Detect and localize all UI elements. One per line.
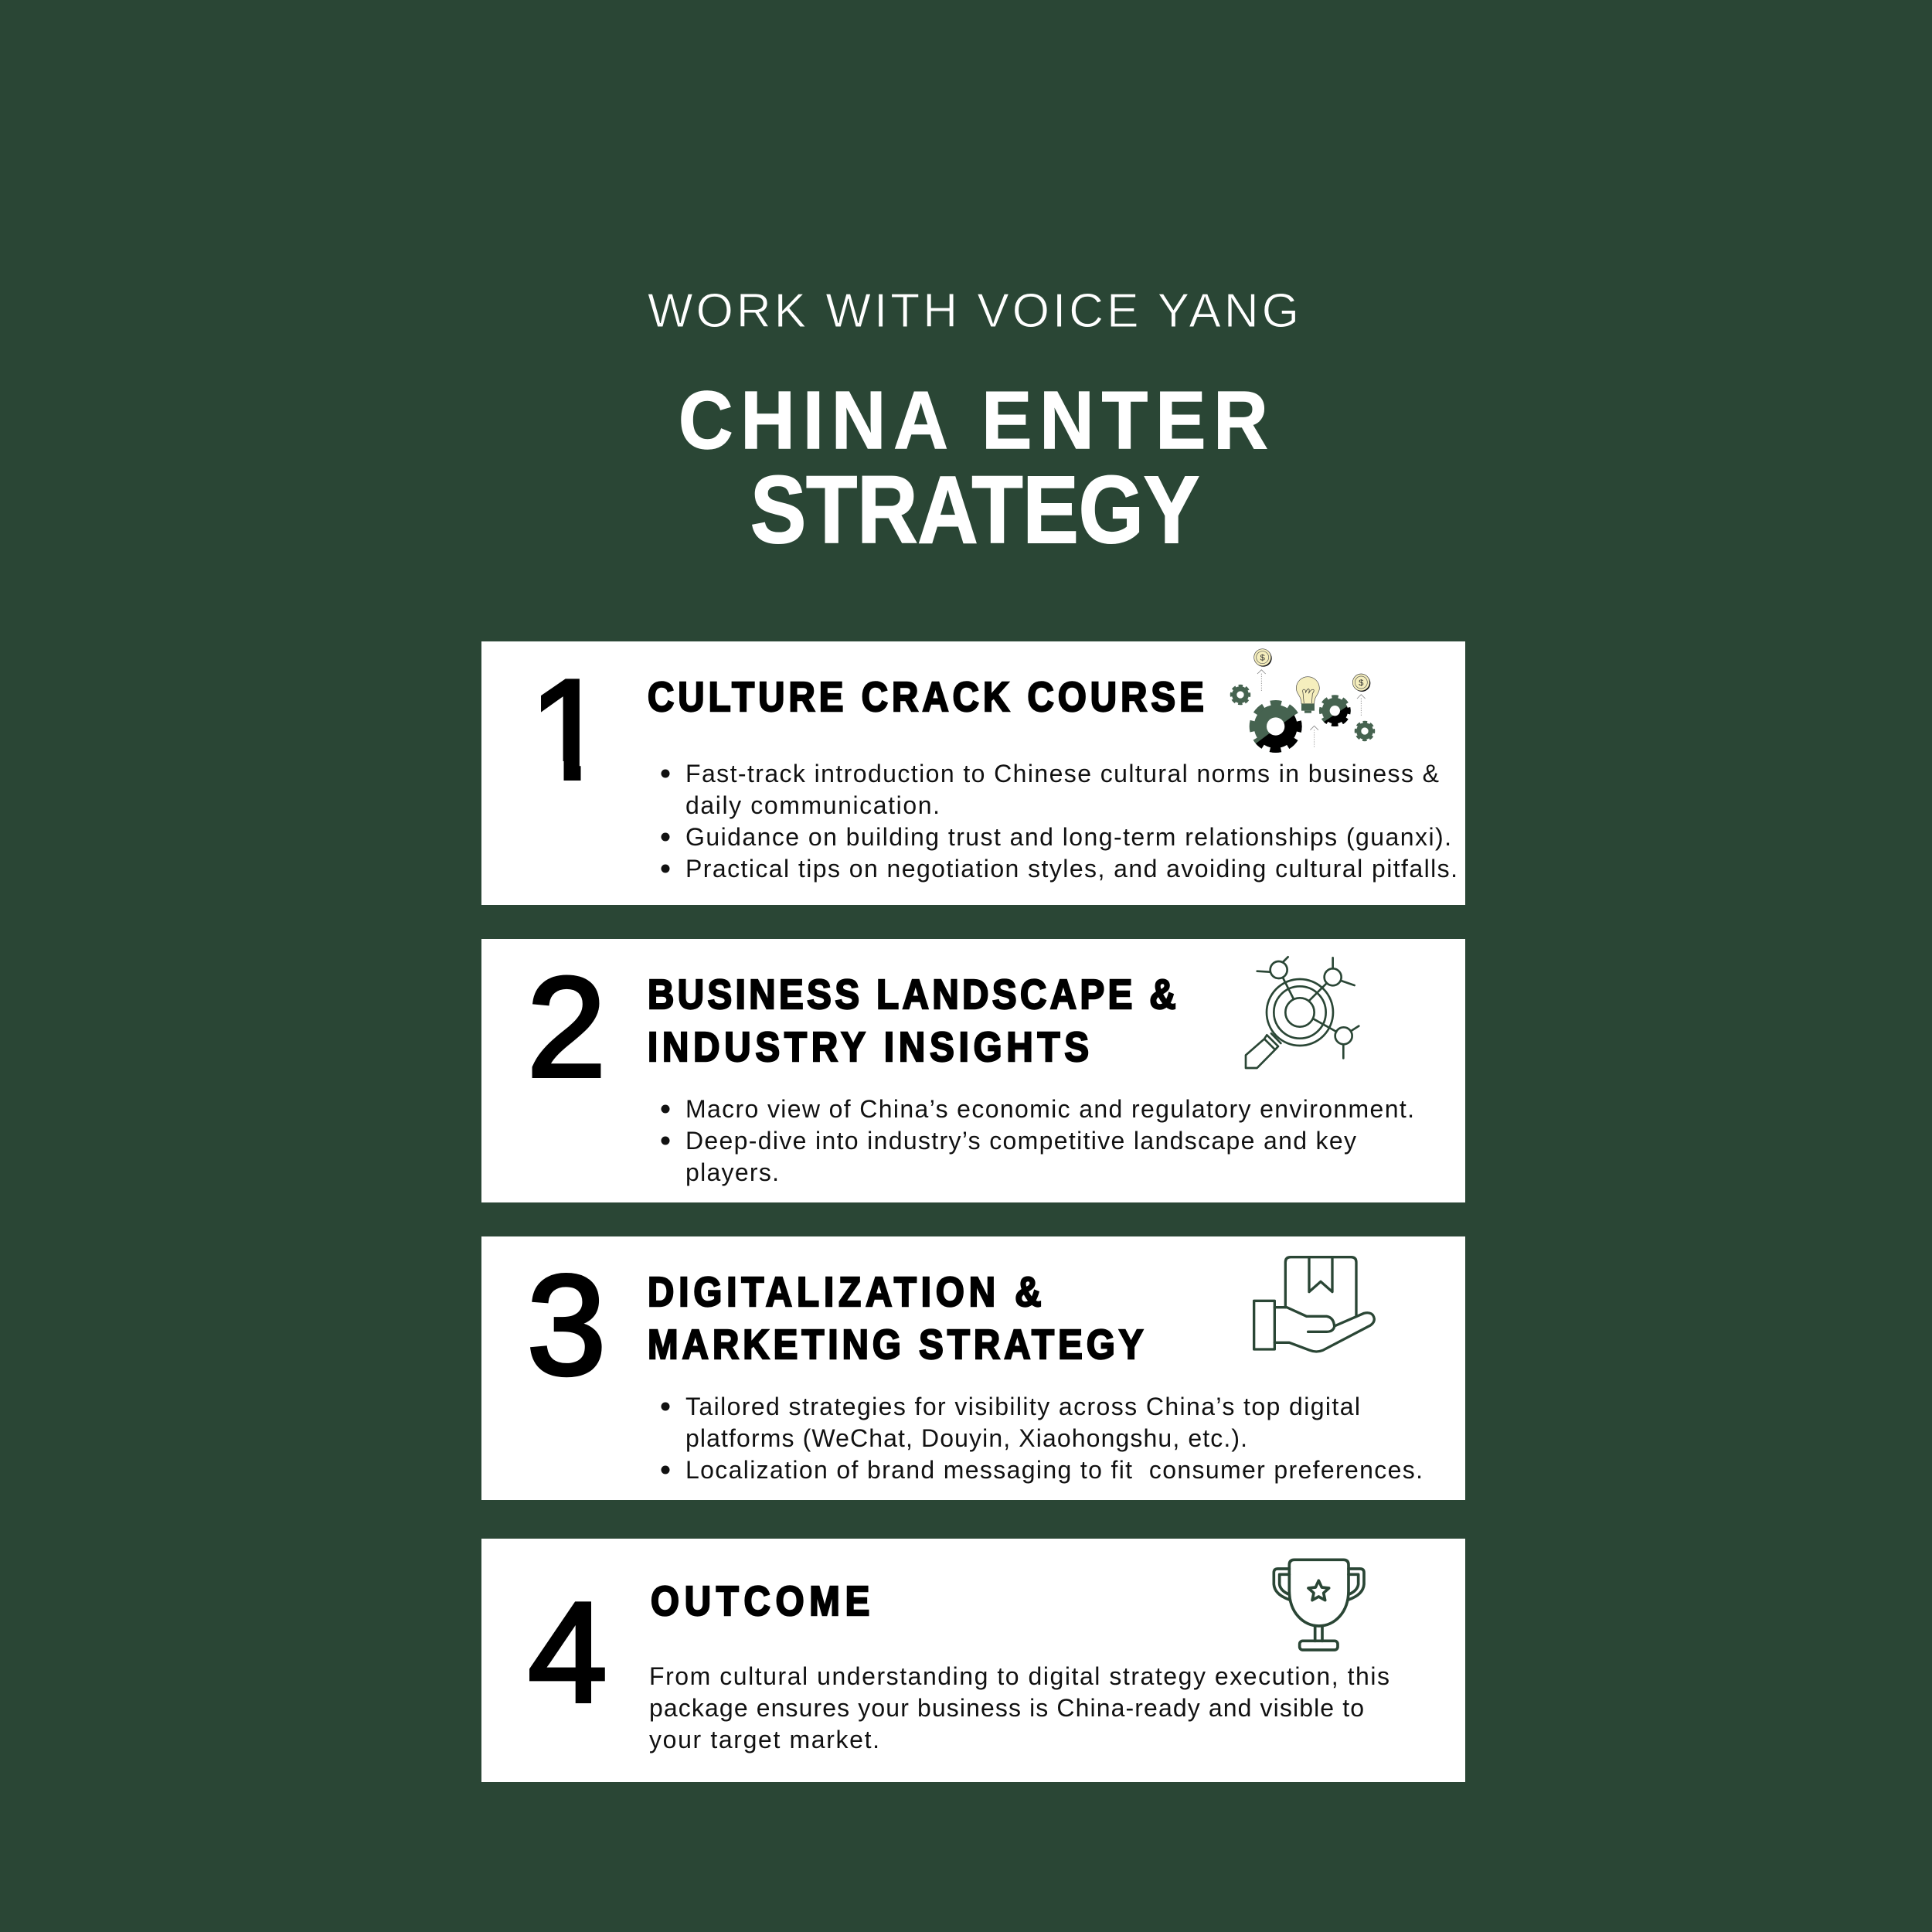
outcome paragraph: package ensures your business is China-ready and visible to bbox=[649, 1694, 1364, 1722]
outcome paragraph: your target market. bbox=[649, 1726, 879, 1753]
outcome paragraph bbox=[649, 1662, 1389, 1753]
icon: hand holding a box bbox=[1254, 1257, 1374, 1352]
heading 3: DIGITALIZATION & bbox=[648, 1268, 1042, 1315]
icon: gears, light bulb and coins: $ bbox=[1260, 654, 1266, 663]
title line 1: CHINA ENTER bbox=[679, 374, 1268, 466]
icon: trophy with star bbox=[1274, 1560, 1364, 1650]
bullet list 1: Practical tips on negotiation styles, and avoiding cultural pitfalls. bbox=[685, 855, 1458, 883]
bullet list 1: Guidance on building trust and long-term relationships (guanxi). bbox=[685, 823, 1451, 851]
bullet list 2: Macro view of China’s economic and regulatory environment. bbox=[685, 1095, 1414, 1123]
number 2: 2 bbox=[527, 947, 606, 1107]
icon: gears, light bulb and coins bbox=[1230, 649, 1376, 754]
number 4: 4 bbox=[528, 1572, 607, 1731]
panel 2: business landscape and industry insights bbox=[481, 939, 1465, 1202]
infographic canvas bbox=[481, 294, 1465, 1782]
bullet list 1 bbox=[662, 760, 1458, 883]
bullet list 3: Tailored strategies for visibility across China’s top digital bbox=[685, 1393, 1360, 1420]
bullet list 3: Localization of brand messaging to fit consumer preferences. bbox=[685, 1456, 1423, 1484]
bullet list 2: Deep-dive into industry’s competitive landscape and key bbox=[685, 1127, 1356, 1155]
eyebrow: work with voice yang: WORK WITH VOICE YANG bbox=[648, 284, 1299, 338]
header block bbox=[648, 284, 1299, 563]
icon: magnifier with network nodes bbox=[1246, 957, 1359, 1068]
bullet list 1: Fast-track introduction to Chinese cultural norms in business & bbox=[685, 760, 1439, 787]
bullet list 2: players. bbox=[685, 1158, 779, 1186]
bullet list 2 bbox=[662, 1095, 1414, 1186]
heading 3: MARKETING STRATEGY bbox=[648, 1321, 1144, 1368]
outcome paragraph: From cultural understanding to digital strategy execution, this bbox=[649, 1662, 1389, 1690]
number 1: 1 bbox=[529, 649, 608, 808]
bullet list 3: platforms (WeChat, Douyin, Xiaohongshu, etc.). bbox=[685, 1424, 1247, 1452]
panel 1: culture crack course bbox=[481, 641, 1465, 905]
heading 1: CULTURE CRACK COURSE bbox=[648, 673, 1204, 720]
heading 2 bbox=[648, 971, 1176, 1070]
panel 4: outcome bbox=[481, 1539, 1465, 1782]
bullet list 3 bbox=[662, 1393, 1423, 1484]
heading 3 bbox=[648, 1268, 1144, 1368]
bullet list 1: daily communication. bbox=[685, 791, 940, 819]
heading 2: INDUSTRY INSIGHTS bbox=[648, 1023, 1089, 1070]
heading 2: BUSINESS LANDSCAPE & bbox=[648, 971, 1176, 1018]
icon: gears, light bulb and coins: $ bbox=[1359, 679, 1364, 688]
heading 4: OUTCOME bbox=[651, 1577, 869, 1624]
number 3: 3 bbox=[527, 1245, 606, 1404]
title line 2: STRATEGY bbox=[750, 457, 1199, 563]
panel 3: digitalization and marketing strategy bbox=[481, 1236, 1465, 1500]
